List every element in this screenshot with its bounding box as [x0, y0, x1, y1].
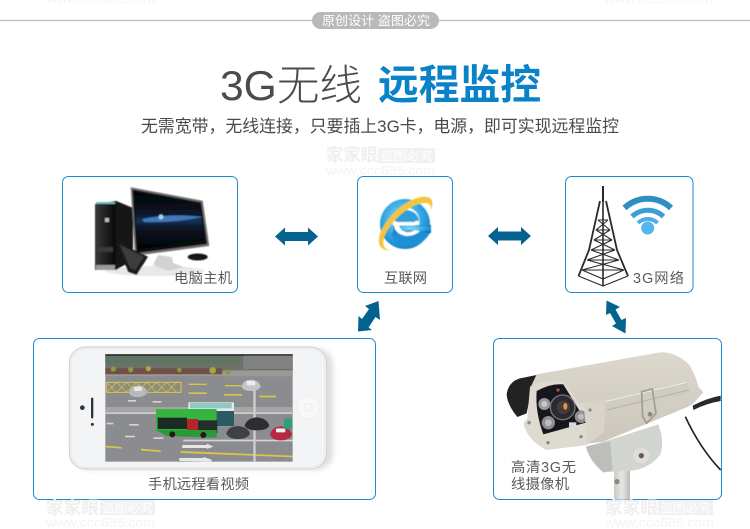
label: camera: 线摄像机	[511, 476, 569, 493]
panel: camera	[494, 338, 722, 500]
panel: computer	[62, 176, 238, 292]
panel: internet	[358, 176, 452, 292]
watermark: centre: 家家眼	[326, 145, 378, 165]
watermark: centre: 盗图必究	[380, 148, 433, 163]
watermark: bottom right: 盗图必究	[660, 500, 711, 515]
icon: desktop computer	[95, 187, 209, 276]
panel: 3G network	[566, 176, 693, 292]
watermark: bottom right	[604, 498, 714, 529]
label: phone: 手机远程看视频	[148, 476, 249, 493]
top divider with badge	[0, 12, 750, 29]
top divider with badge: 原创设计 盗图必究	[322, 13, 431, 28]
icon: signal tower	[578, 186, 628, 286]
label: camera: 高清3G无	[511, 459, 576, 476]
arrow: internet to phone	[358, 301, 380, 332]
arrow: computer to internet	[275, 228, 318, 246]
panel: phone	[34, 338, 376, 500]
watermark: bottom right: 家家眼	[605, 498, 659, 518]
title: 3G无线	[220, 62, 362, 109]
icon: surveillance camera	[507, 352, 721, 500]
arrow: internet to 3G network	[488, 227, 531, 245]
label: 3G network: 3G网络	[633, 270, 684, 287]
label: internet: 互联网	[384, 270, 427, 287]
watermark: centre: www.ccc686.com	[325, 163, 435, 178]
arrow: 3G network to camera	[606, 300, 626, 334]
title	[220, 62, 541, 109]
title: 远程监控	[378, 62, 541, 108]
label: camera	[511, 459, 576, 493]
watermark: centre	[325, 145, 435, 178]
subtitle: 无需宽带，无线连接，只要插上3G卡，电源，即可实现远程监控	[141, 117, 619, 136]
label: computer: 电脑主机	[174, 270, 232, 287]
icon: internet explorer	[379, 197, 432, 250]
icon: smartphone with traffic video	[69, 347, 333, 470]
icon: wifi signal	[624, 199, 671, 234]
watermark: bottom left: 盗图必究	[102, 500, 153, 515]
watermark: bottom left	[45, 498, 155, 529]
watermark: bottom left: 家家眼	[46, 498, 100, 518]
